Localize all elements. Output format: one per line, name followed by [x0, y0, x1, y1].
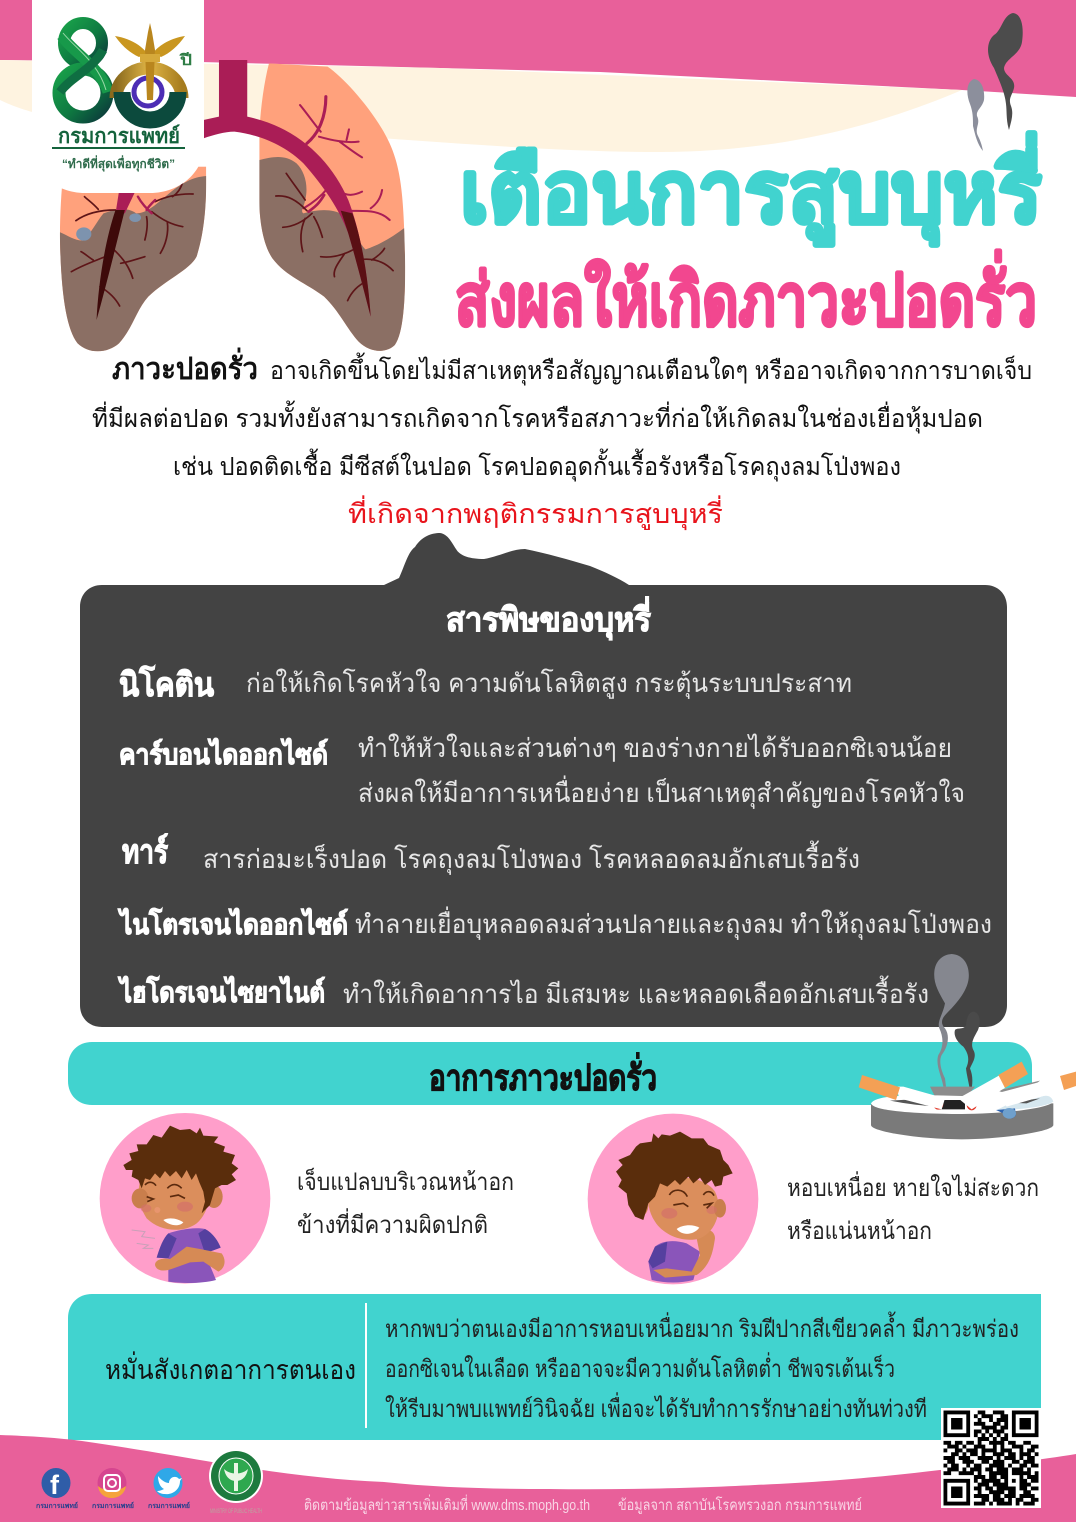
panel: toxins in cigarettes	[80, 533, 1007, 1027]
slogan: “ทำดีที่สุดเพื่อทุกชีวิต”	[62, 155, 175, 172]
footer text: source: ข้อมูลจาก สถาบันโรคทรวงอก กรมการแพทย์	[618, 1496, 862, 1514]
icon: smoke above title	[967, 13, 1023, 151]
shirt	[157, 1228, 221, 1283]
toxin: carbon dioxide: ส่งผลให้มีอาการเหนื่อยง่าย เป็นสาเหตุสำคัญของโรคหัวใจ	[358, 775, 965, 809]
banner: symptoms heading	[68, 1042, 1032, 1105]
left lung	[59, 163, 210, 357]
head	[139, 1167, 209, 1230]
head	[648, 1178, 719, 1240]
veins: left lung	[71, 182, 193, 306]
shirt	[648, 1241, 700, 1282]
veins: right lung	[71, 97, 393, 306]
right lung	[255, 60, 410, 357]
icon: blue spots	[76, 213, 141, 241]
social icon: facebook: f	[50, 1470, 60, 1500]
toxin: carbon dioxide: คาร์บอนไดออกไซด์	[119, 738, 328, 770]
social icon: twitter	[148, 1468, 190, 1510]
face details	[163, 1218, 183, 1225]
toxin: hydrogen cyanide	[117, 975, 929, 1009]
intro text block: ที่มีผลต่อปอด รวมทั้งยังสามารถเกิดจากโรคหรือสภาวะที่ก่อให้เกิดลมในช่องเยื่อหุ้มปอด	[92, 400, 983, 434]
social icon: facebook	[36, 1468, 78, 1510]
panel heading: หมั่นสังเกตอาการตนเอง	[105, 1351, 356, 1385]
social icon: twitter: กรมการแพทย์	[148, 1501, 190, 1510]
emblem: ministry of public health: MINISTRY OF PUBLIC HEALTH	[210, 1509, 262, 1515]
illustration: boy coughing and short of breath	[588, 1114, 758, 1284]
social icon: instagram	[92, 1468, 134, 1510]
icon: cigarette far right	[997, 1072, 1076, 1107]
social icon: instagram: กรมการแพทย์	[92, 1501, 134, 1510]
symptom text: chest pain	[297, 1167, 514, 1239]
icon: number eight	[59, 23, 108, 117]
symptom text: shortness of breath: หอบเหนื่อย หายใจไม่สะดวก	[787, 1171, 1039, 1202]
toxin: nitrogen dioxide	[117, 906, 992, 940]
toxin: carbon dioxide	[119, 733, 965, 809]
pain marks	[132, 1230, 155, 1248]
intro text block	[92, 347, 1032, 531]
banner: symptoms heading: อาการภาวะปอดรั่ว	[429, 1052, 657, 1098]
arm and hand	[653, 1230, 715, 1278]
illustration: ashtray with cigarettes	[859, 954, 1076, 1139]
title: เตือนการสูบบุหรี่	[460, 131, 1042, 246]
icon: cigarette left	[859, 1075, 945, 1109]
illustration: damaged lungs	[59, 60, 410, 357]
toxin: nitrogen dioxide: ทำลายเยื่อบุหลอดลมส่วนปลายและถุงลม ทำให้ถุงลมโป่งพอง	[355, 906, 992, 940]
hair	[123, 1126, 238, 1213]
advice text	[385, 1311, 1019, 1423]
emblem: ministry of public health	[209, 1449, 263, 1515]
intro text block: เช่น ปอดติดเชื้อ มีซีสต์ในปอด โรคปอดอุดกั้นเรื้อรังหรือโรคถุงลมโป่งพอง	[173, 448, 901, 482]
symptom text: chest pain: เจ็บแปลบบริเวณหน้าอก	[297, 1167, 514, 1196]
hair	[616, 1132, 733, 1220]
symptom text: shortness of breath	[787, 1171, 1039, 1245]
department name: กรมการแพทย์	[58, 124, 180, 148]
panel heading: สารพิษของบุหรี่	[446, 596, 651, 641]
toxin: nicotine: ก่อให้เกิดโรคหัวใจ ความดันโลหิตสูง กระตุ้นระบบประสาท	[246, 668, 852, 699]
icon: gold caduceus emblem	[115, 23, 185, 120]
logo panel: 80 years department of medical services	[32, 0, 204, 193]
year label: ปี	[179, 52, 192, 69]
illustration: boy with chest pain	[100, 1113, 270, 1284]
intro text block: อาจเกิดขึ้นโดยไม่มีสาเหตุหรือสัญญาณเตือนใดๆ หรืออาจเกิดจากการบาดเจ็บ	[270, 352, 1032, 386]
toxin: tar	[122, 833, 860, 875]
icon: cigarette right	[958, 1062, 1028, 1109]
toxin: nitrogen dioxide: ไนโตรเจนไดออกไซด์	[117, 907, 348, 940]
toxin: hydrogen cyanide: ทำให้เกิดอาการไอ มีเสมหะ และหลอดเลือดอักเสบเรื้อรัง	[343, 975, 929, 1009]
footer text: website: ติดตามข้อมูลข่าวสารเพิ่มเติมที่ www.dms.moph.go.th	[304, 1494, 590, 1514]
icon: small smoke	[955, 1012, 980, 1094]
intro text block: ที่เกิดจากพฤติกรรมการสูบบุหรี่	[348, 495, 723, 531]
toxin: tar: ทาร์	[122, 833, 168, 870]
panel: self-observation advice	[68, 1294, 1041, 1440]
symptom text: shortness of breath: หรือแน่นหน้าอก	[787, 1218, 932, 1245]
toxin: nicotine	[119, 665, 852, 703]
social icon: facebook: กรมการแพทย์	[36, 1501, 78, 1510]
toxin: hydrogen cyanide: ไฮโดรเจนไซยาไนต์	[117, 975, 325, 1008]
ashtray body	[871, 1103, 1053, 1139]
footer wave	[0, 1435, 1076, 1522]
icon: large smoke	[934, 954, 969, 1087]
advice text: ให้รีบมาพบแพทย์วินิจฉัย เพื่อจะได้รับทำการรักษาอย่างทันท่วงที	[385, 1392, 927, 1423]
icon: trachea and bronchi	[203, 60, 371, 317]
arms	[155, 1247, 225, 1272]
toxin: nicotine: นิโคติน	[119, 665, 214, 703]
symptom text: chest pain: ข้างที่มีความผิดปกติ	[297, 1208, 488, 1239]
QR code	[941, 1408, 1041, 1508]
face details	[677, 1225, 699, 1234]
toxin: tar: สารก่อมะเร็งปอด โรคถุงลมโป่งพอง โรคหลอดลมอักเสบเรื้อรัง	[203, 840, 860, 875]
advice text: ออกซิเจนในเลือด หรืออาจจะมีความดันโลหิตต่ำ ชีพจรเต้นเร็ว	[385, 1352, 895, 1383]
intro text block: ภาวะปอดรั่ว	[112, 347, 258, 386]
toxin: carbon dioxide: ทำให้หัวใจและส่วนต่างๆ ของร่างกายได้รับออกซิเจนน้อย	[358, 733, 952, 763]
